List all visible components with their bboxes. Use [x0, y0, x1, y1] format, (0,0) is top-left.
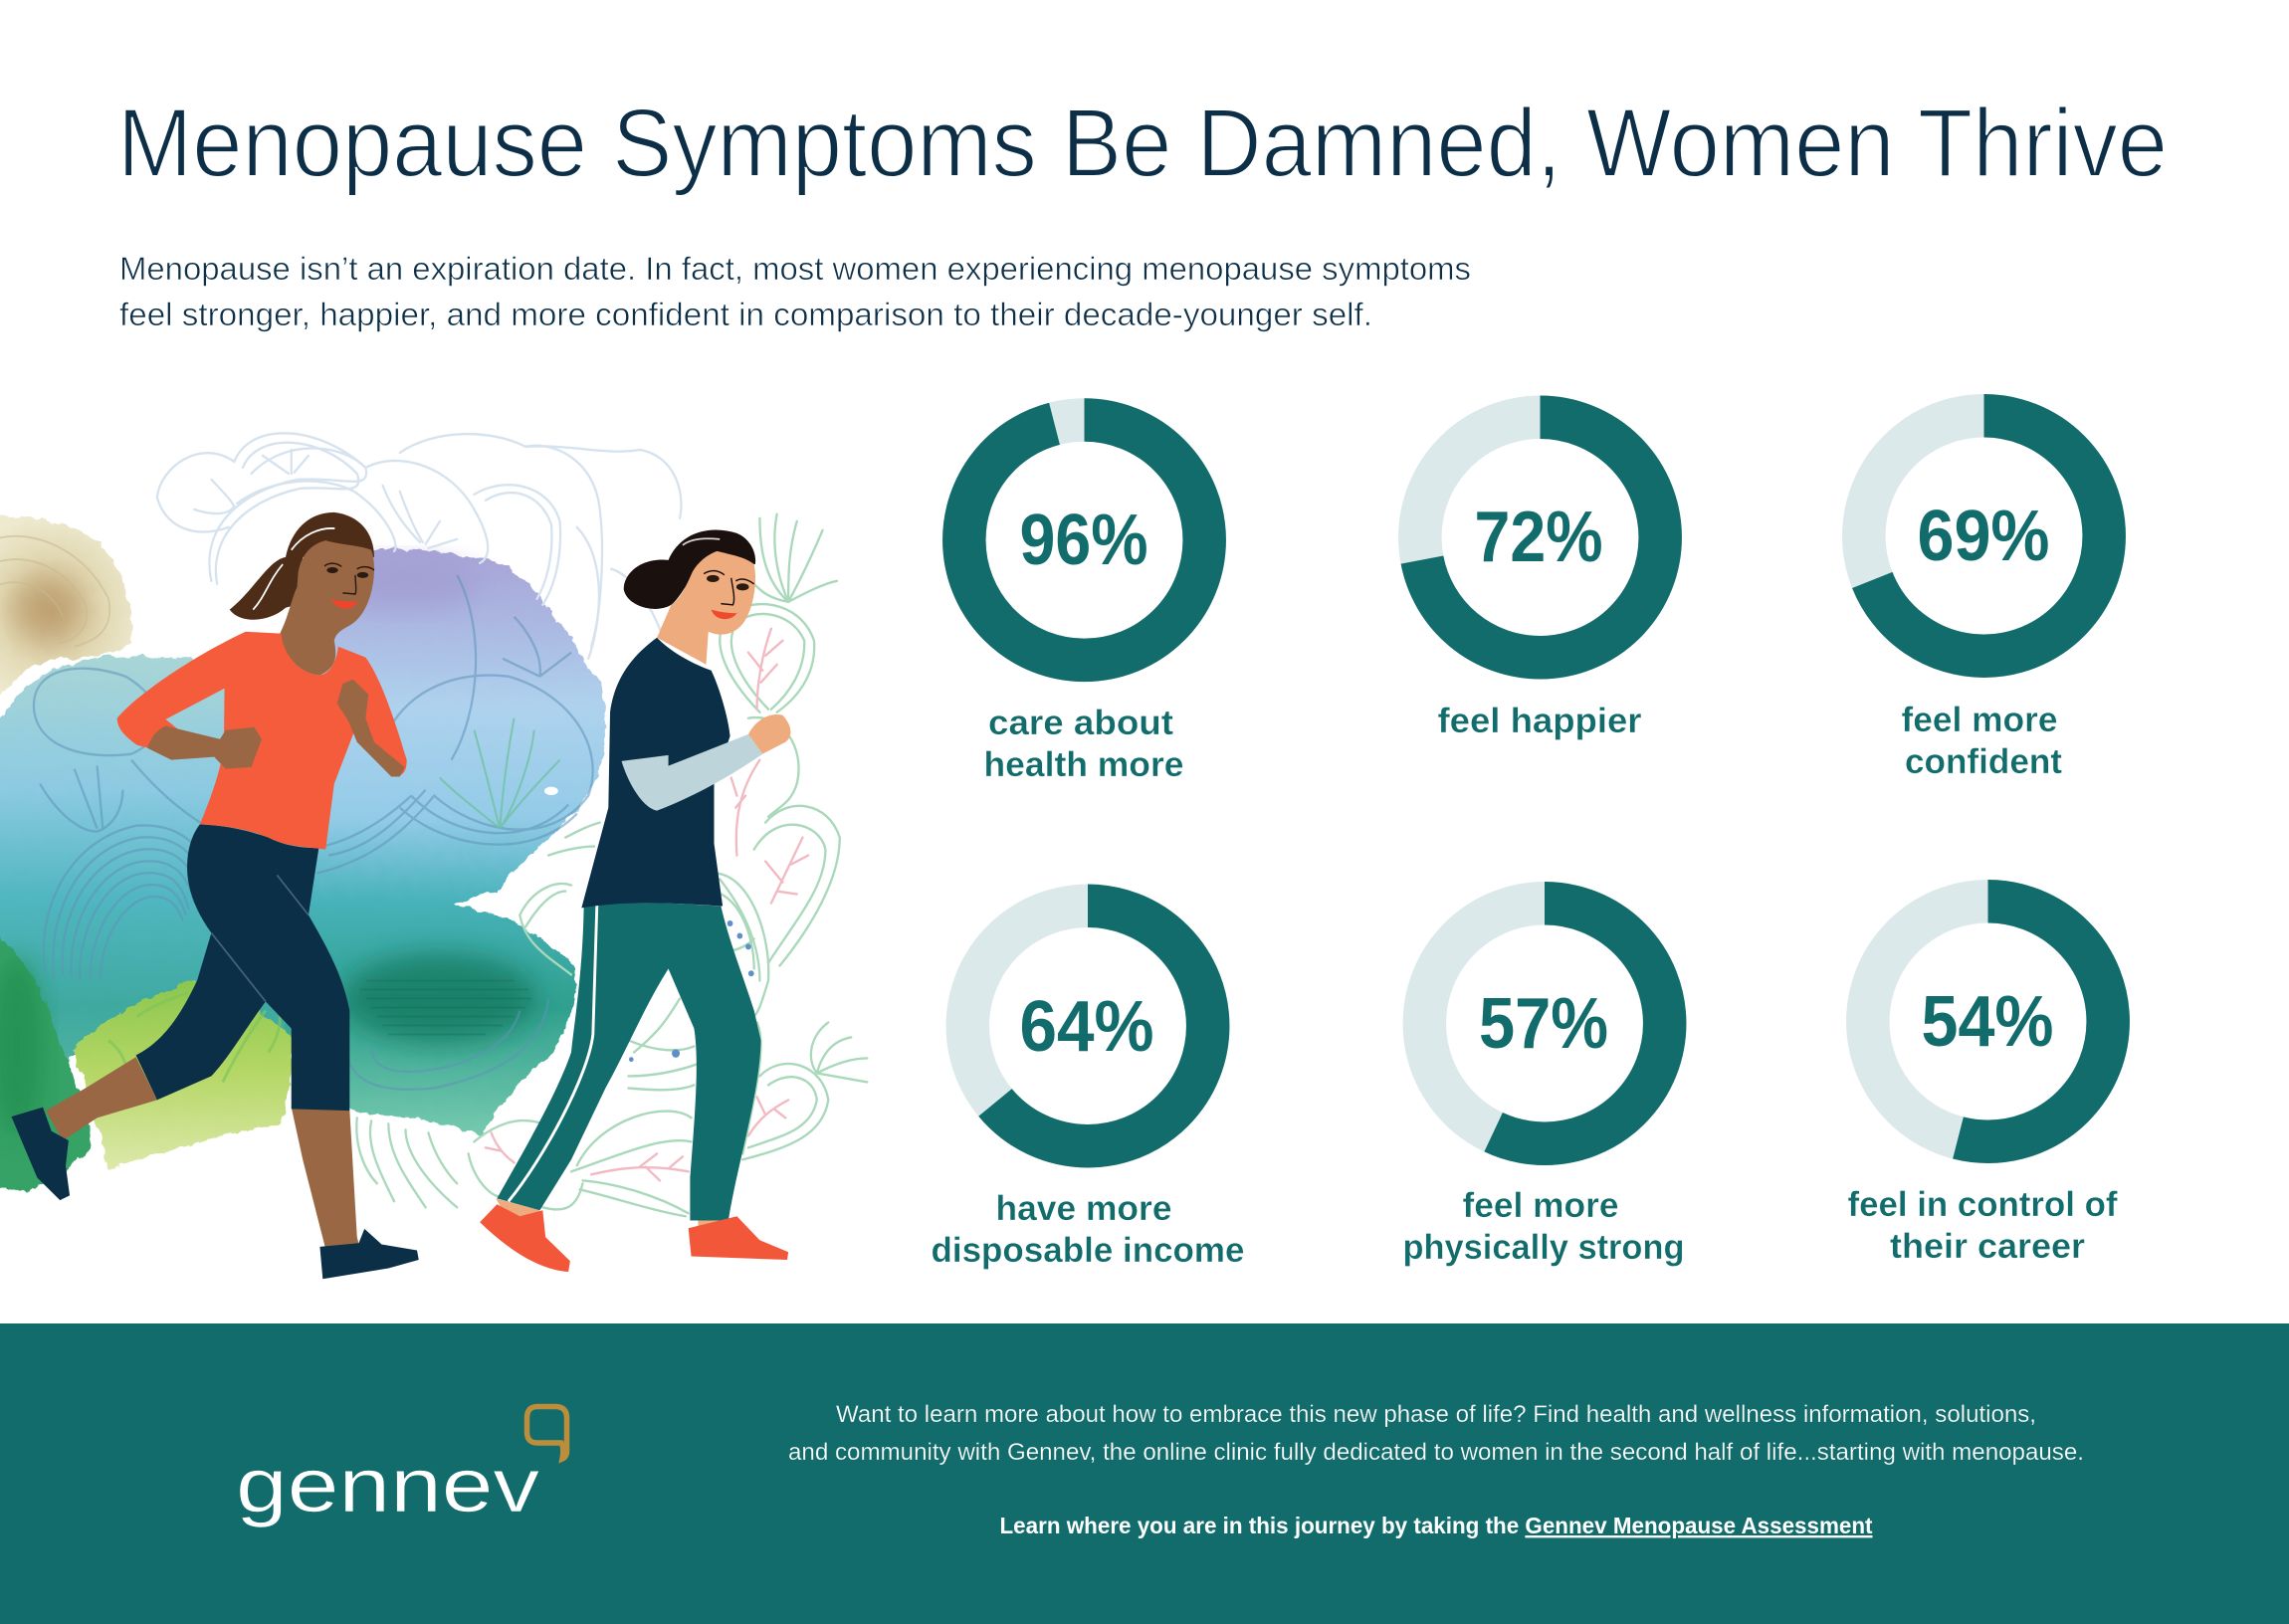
stat: 57%	[1403, 904, 1684, 1267]
sleeve	[622, 734, 762, 811]
stat: 69%: 69%	[1917, 497, 2050, 576]
hand	[748, 714, 790, 754]
title: Menopause Symptoms Be Damned, Women Thrive	[117, 89, 2168, 197]
blue dots	[629, 920, 754, 1062]
stat: 54%	[1847, 902, 2118, 1266]
blue line pattern	[157, 433, 681, 659]
logo: gennev: gennev	[236, 1443, 540, 1528]
stat: 72%	[1420, 417, 1660, 740]
stat: 57%: physically strong	[1403, 1228, 1684, 1267]
shirt	[581, 638, 730, 908]
stat: 64%: have more	[995, 1189, 1172, 1228]
watercolor background	[0, 515, 605, 1191]
green line plants	[356, 514, 867, 1216]
back shoe	[11, 1108, 70, 1200]
stat: 54%: feel in control of	[1847, 1185, 2118, 1224]
footer band	[0, 1323, 2289, 1624]
intro text: Menopause isn’t an expiration date. In fact, most women experiencing menopause symptoms	[119, 251, 1471, 287]
stat: 96%: health more	[983, 745, 1184, 784]
leggings	[136, 824, 349, 1111]
stat: 96%	[964, 420, 1204, 784]
neck and face	[280, 540, 374, 676]
stat: 69%: confident	[1905, 742, 2062, 781]
front shoe	[319, 1229, 419, 1279]
intro text	[119, 251, 1471, 332]
facial details	[683, 538, 754, 619]
left shoe	[480, 1204, 570, 1272]
pink branches	[486, 629, 808, 1180]
call to action: Learn where you are in this journey by taking the Gennev Menopause Assessment	[999, 1513, 1873, 1538]
forearms and fists	[147, 726, 262, 769]
figure: runner in orange shirt	[11, 512, 419, 1279]
footer message	[788, 1401, 2084, 1466]
logo: gennev	[236, 1407, 567, 1528]
track pants	[497, 903, 761, 1220]
shirt	[117, 632, 407, 850]
back leg	[46, 1057, 157, 1140]
stat: 57%: feel more	[1463, 1186, 1618, 1225]
beige contour lines	[0, 536, 109, 647]
teal contour lines	[34, 575, 593, 1090]
hair	[230, 512, 374, 620]
stat: 54%: their career	[1890, 1227, 2085, 1266]
stat: 54%: 54%	[1921, 982, 2054, 1062]
face and neck	[657, 551, 755, 665]
intro text: feel stronger, happier, and more confident in comparison to their decade-younger self.	[119, 297, 1372, 332]
ankles	[496, 1198, 728, 1230]
stat: 72%: feel happier	[1437, 702, 1642, 740]
illustration: two women running	[0, 433, 867, 1279]
hair bun and hair	[624, 529, 755, 609]
stat: 96%: care about	[988, 704, 1173, 742]
facial details	[253, 528, 374, 610]
stat: 57%: 57%	[1479, 984, 1608, 1064]
stat: 72%: 72%	[1475, 498, 1602, 577]
right shoe	[689, 1216, 788, 1260]
stat: 96%: 96%	[1019, 501, 1148, 580]
footer message: Want to learn more about how to embrace this new phase of life? Find health and wellness information, solutions,	[836, 1401, 2036, 1428]
stat: 69%	[1864, 416, 2104, 781]
icon: speech bubble	[527, 1407, 567, 1459]
front leg	[292, 1108, 360, 1249]
footer message: and community with Gennev, the online clinic fully dedicated to women in the second half of life...starting with menopause.	[788, 1439, 2084, 1466]
stat: 64%: disposable income	[932, 1231, 1244, 1270]
stats grid	[932, 416, 2118, 1270]
stat: 64%	[932, 906, 1244, 1270]
stat: 69%: feel more	[1901, 701, 2058, 739]
figure: walker in navy shirt	[480, 529, 790, 1272]
stat: 64%: 64%	[1019, 987, 1154, 1067]
